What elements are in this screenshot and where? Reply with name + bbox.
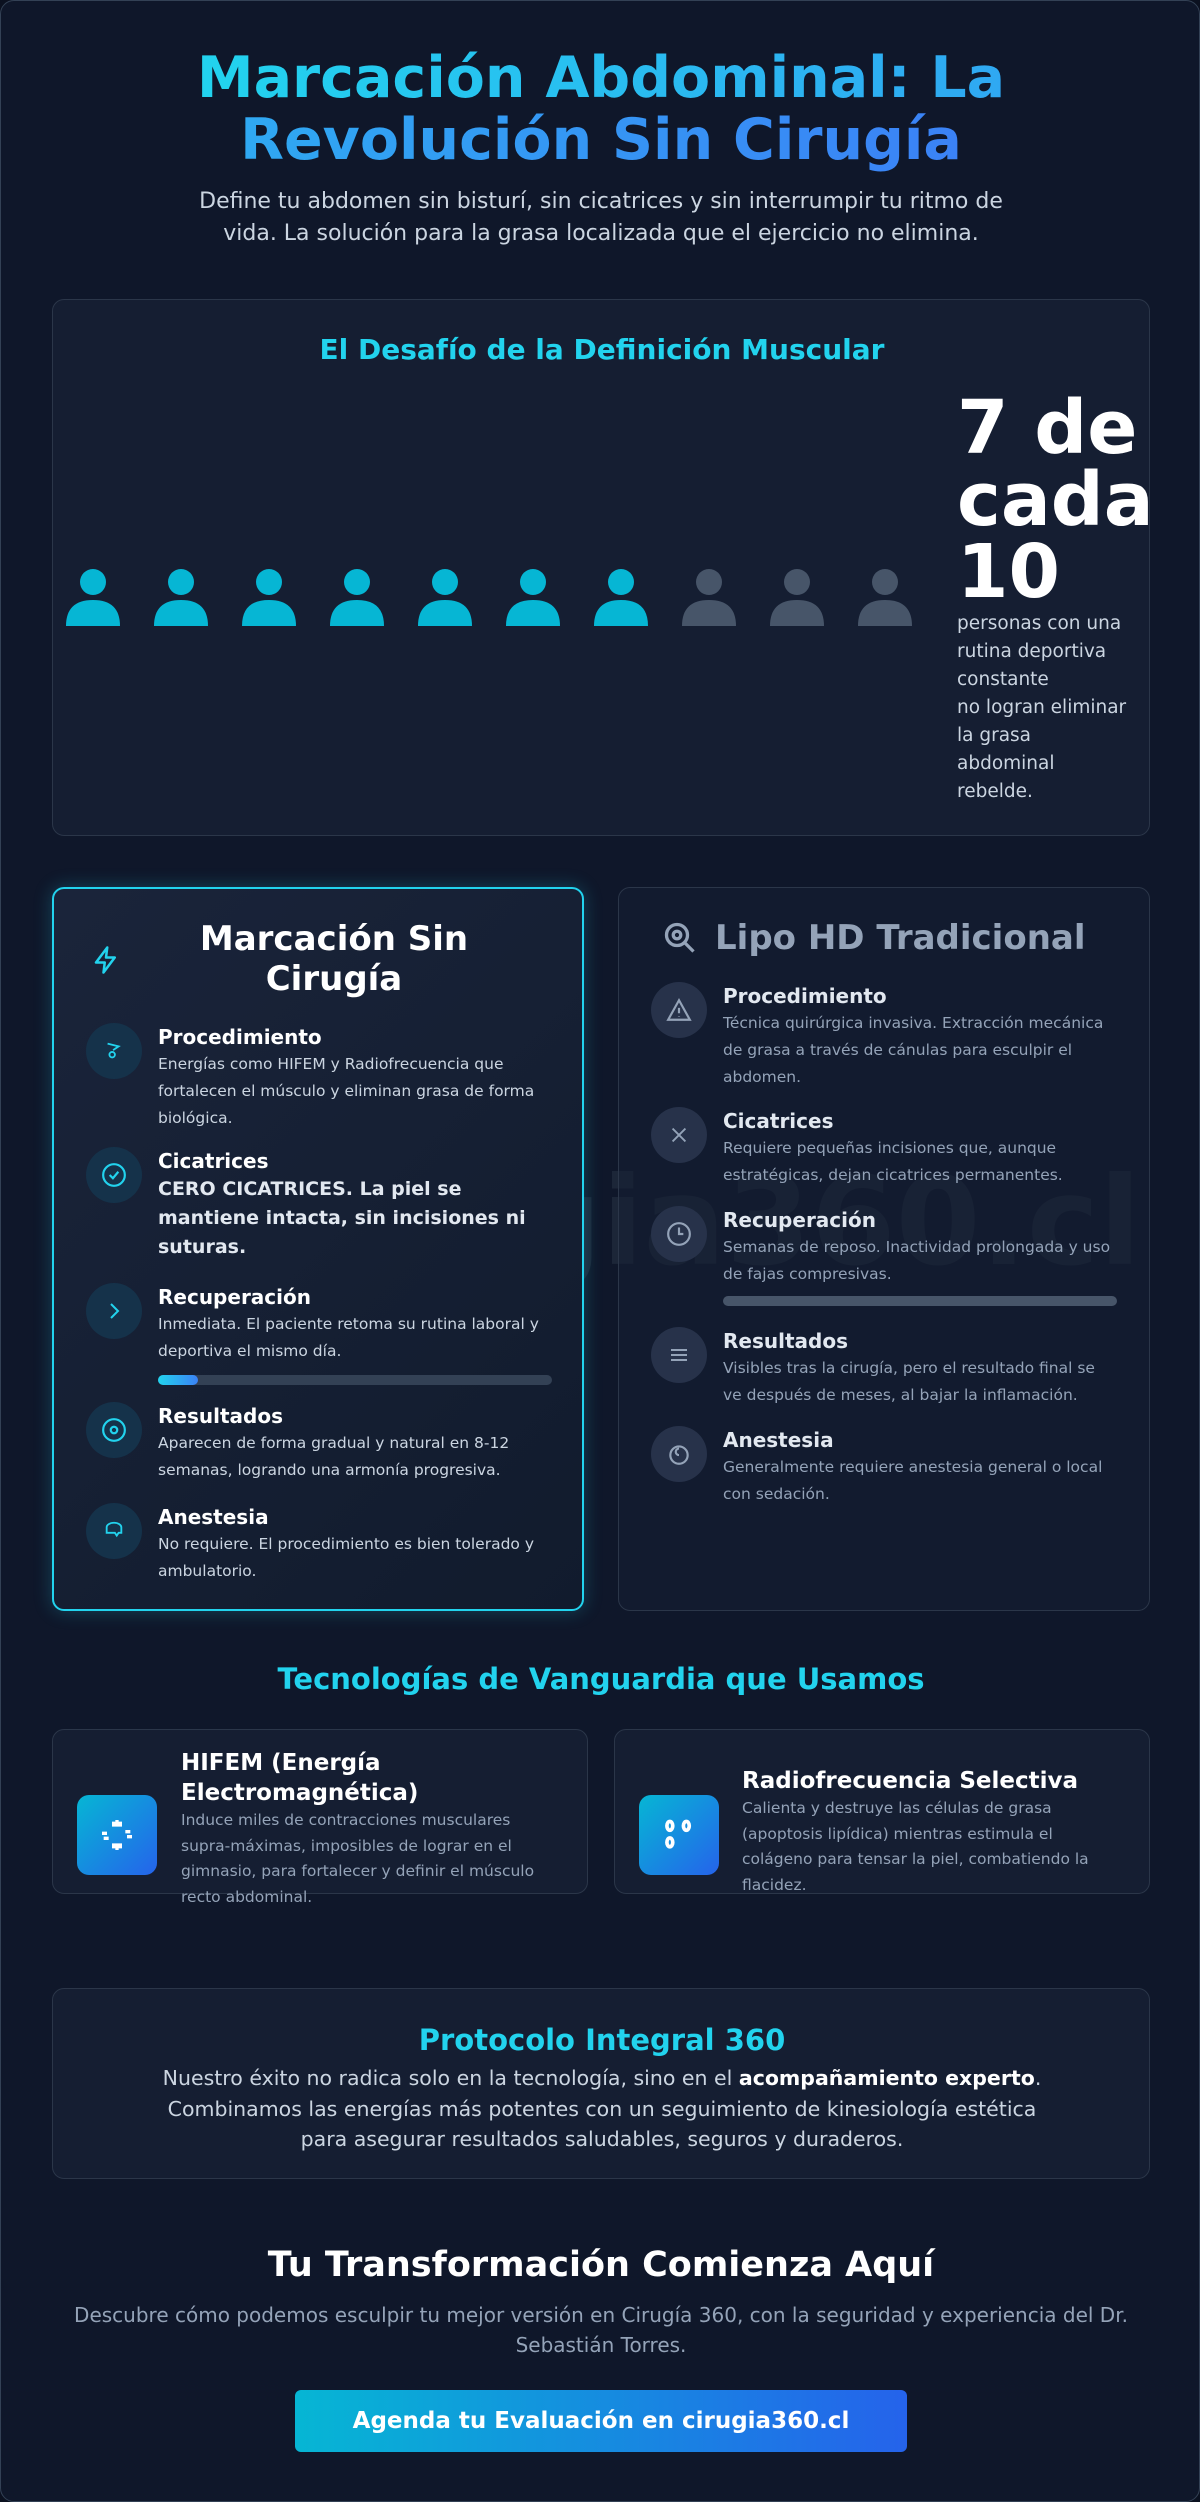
title xyxy=(197,45,1005,173)
stat: 7 de cada 10 xyxy=(957,385,1154,802)
heading: technologies: Tecnologías de Vanguardia que Usamos xyxy=(277,1662,925,1696)
text: hifem: HIFEM (Energía Electromagnética) xyxy=(181,1750,418,1806)
pictogram: 7 of 10 people xyxy=(66,569,912,626)
item: cicatrices: CERO CICATRICES. La piel se mantiene intacta, sin incisiones ni suturas. xyxy=(158,1178,526,1258)
item: anestesia: Anestesia xyxy=(158,1505,269,1529)
card: radiofrecuencia xyxy=(614,1729,1150,1894)
item: anestesia: No requiere. El procedimiento es bien tolerado y ambulatorio. xyxy=(158,1535,534,1580)
heading: left card: Marcación Sin Cirugía xyxy=(200,919,468,999)
item: anestesia xyxy=(86,1503,534,1580)
item: anestesia xyxy=(651,1426,1102,1503)
text: hifem xyxy=(181,1750,534,1906)
heading: right card: Lipo HD Tradicional xyxy=(715,918,1086,958)
heading: CTA: Tu Transformación Comienza Aquí xyxy=(268,2245,934,2285)
item: procedimiento: Energías como HIFEM y Radiofrecuencia que fortalecen el músculo y eliminan grasa de forma biológica. xyxy=(158,1055,534,1127)
item: procedimiento: Técnica quirúrgica invasiva. Extracción mecánica de grasa a través de cánulas para esculpir el abdomen. xyxy=(723,1014,1103,1086)
item: cicatrices xyxy=(651,1107,1063,1184)
button: CTA: Agenda tu Evaluación en cirugia360.cl xyxy=(353,2408,849,2434)
stat: 7 de cada 10: no logran eliminar la grasa abdominal rebelde. xyxy=(957,697,1126,802)
item: recuperación: Inmediata. El paciente retoma su rutina laboral y deportiva el mismo día. xyxy=(158,1315,539,1360)
subtitle: Define tu abdomen sin bisturí, sin cicatrices y sin interrumpir tu ritmo de vida. La solución para la grasa localizada que el ejercicio no elimina. xyxy=(199,189,1003,246)
item: resultados: Visibles tras la cirugía, pero el resultado final se ve después de meses, al bajar la inflamación. xyxy=(723,1359,1095,1404)
item: resultados xyxy=(86,1402,509,1479)
heading: challenge: El Desafío de la Definición Muscular xyxy=(320,333,884,366)
watermark: cirugia360.cl xyxy=(253,1151,1141,1293)
item: recuperación xyxy=(86,1283,552,1385)
item: cicatrices: Cicatrices xyxy=(723,1109,834,1133)
stat: 7 de cada 10: personas con una rutina deportiva constante xyxy=(957,613,1121,690)
item: cicatrices: Cicatrices xyxy=(158,1149,268,1173)
item: procedimiento xyxy=(86,1023,534,1127)
card: HIFEM xyxy=(52,1729,588,1894)
panel: protocolo xyxy=(52,1988,1150,2179)
item: procedimiento xyxy=(651,982,1103,1086)
panel: challenge xyxy=(52,299,1150,836)
item: resultados: Resultados xyxy=(158,1404,283,1428)
icon: rf xyxy=(639,1795,719,1875)
heading: protocolo: Protocolo Integral 360 xyxy=(419,2023,785,2057)
item: recuperación: Recuperación xyxy=(723,1208,876,1232)
button: CTA xyxy=(295,2390,907,2452)
progress bar xyxy=(158,1375,552,1385)
item: cicatrices: Requiere pequeñas incisiones que, aunque estratégicas, dejan cicatrices permanentes. xyxy=(723,1139,1063,1184)
icon: hifem xyxy=(77,1795,157,1875)
title: Marcación Abdominal: La xyxy=(197,45,1005,111)
panel: marcación sin cirugía xyxy=(52,887,584,1611)
text: rf: Radiofrecuencia Selectiva xyxy=(742,1768,1078,1794)
item: recuperación: Recuperación xyxy=(158,1285,311,1309)
item: anestesia: Anestesia xyxy=(723,1428,834,1452)
item: recuperación: Semanas de reposo. Inactividad prolongada y uso de fajas compresivas. xyxy=(723,1238,1110,1283)
progress bar full xyxy=(723,1296,1117,1306)
panel: lipo hd xyxy=(618,887,1150,1611)
icon: magnifier xyxy=(664,922,695,953)
text: rf: Calienta y destruye las células de grasa (apoptosis lipídica) mientras estimula el colágeno para tensar la piel, combatiendo la flacidez. xyxy=(742,1799,1089,1894)
icon: lightning xyxy=(94,946,116,974)
item: recuperación xyxy=(651,1206,1117,1306)
item: procedimiento: Procedimiento xyxy=(158,1025,322,1049)
title: Revolución Sin Cirugía xyxy=(240,107,962,173)
item: resultados: Aparecen de forma gradual y natural en 8-12 semanas, logrando una armonía progresiva. xyxy=(158,1434,509,1479)
text: protocolo: Nuestro éxito no radica solo en la tecnología, sino en el acompañamiento experto. Combinamos las energías más potentes con un seguimiento de kinesiología estética para asegurar resultados saludables, seguros y duraderos. xyxy=(163,2066,1041,2151)
text: CTA: Descubre cómo podemos esculpir tu mejor versión en Cirugía 360, con la seguridad y experiencia del Dr. Sebastián Torres. xyxy=(74,2303,1128,2357)
item: anestesia: Generalmente requiere anestesia general o local con sedación. xyxy=(723,1458,1102,1503)
item: resultados: Resultados xyxy=(723,1329,848,1353)
item: cicatrices xyxy=(86,1147,526,1258)
item: procedimiento: Procedimiento xyxy=(723,984,887,1008)
stat: 7 de cada 10: 7 de cada 10 xyxy=(957,385,1154,615)
text: hifem: Induce miles de contracciones musculares supra-máximas, imposibles de lograr en el gimnasio, para fortalecer y definir el músculo recto abdominal. xyxy=(181,1811,534,1906)
item: resultados xyxy=(651,1327,1095,1404)
